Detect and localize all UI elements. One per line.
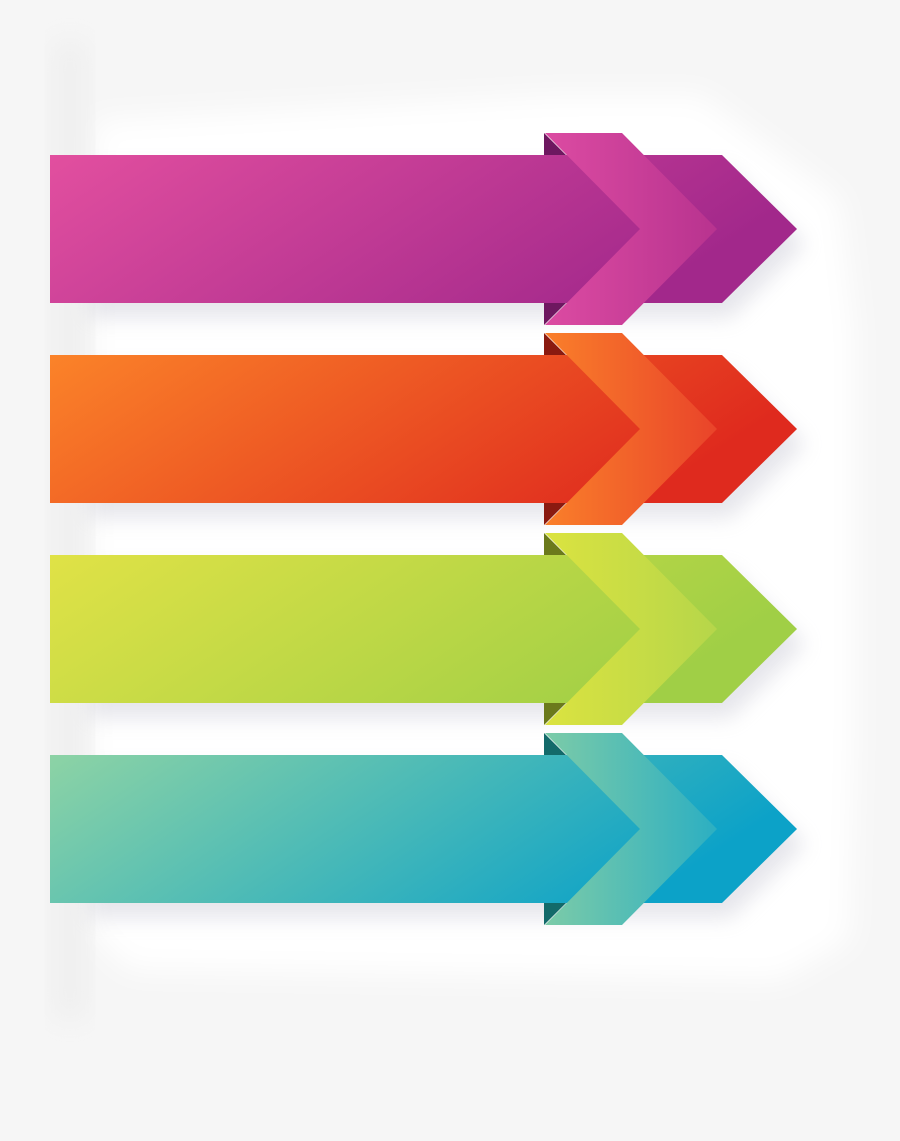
arrow 2: orange: [50, 333, 805, 525]
left strip: [52, 40, 88, 1020]
glow backdrop: [90, 95, 855, 980]
arrow 4: teal: [50, 733, 805, 925]
arrow 3: lime: [50, 533, 805, 725]
arrow 1: magenta: [50, 133, 805, 325]
